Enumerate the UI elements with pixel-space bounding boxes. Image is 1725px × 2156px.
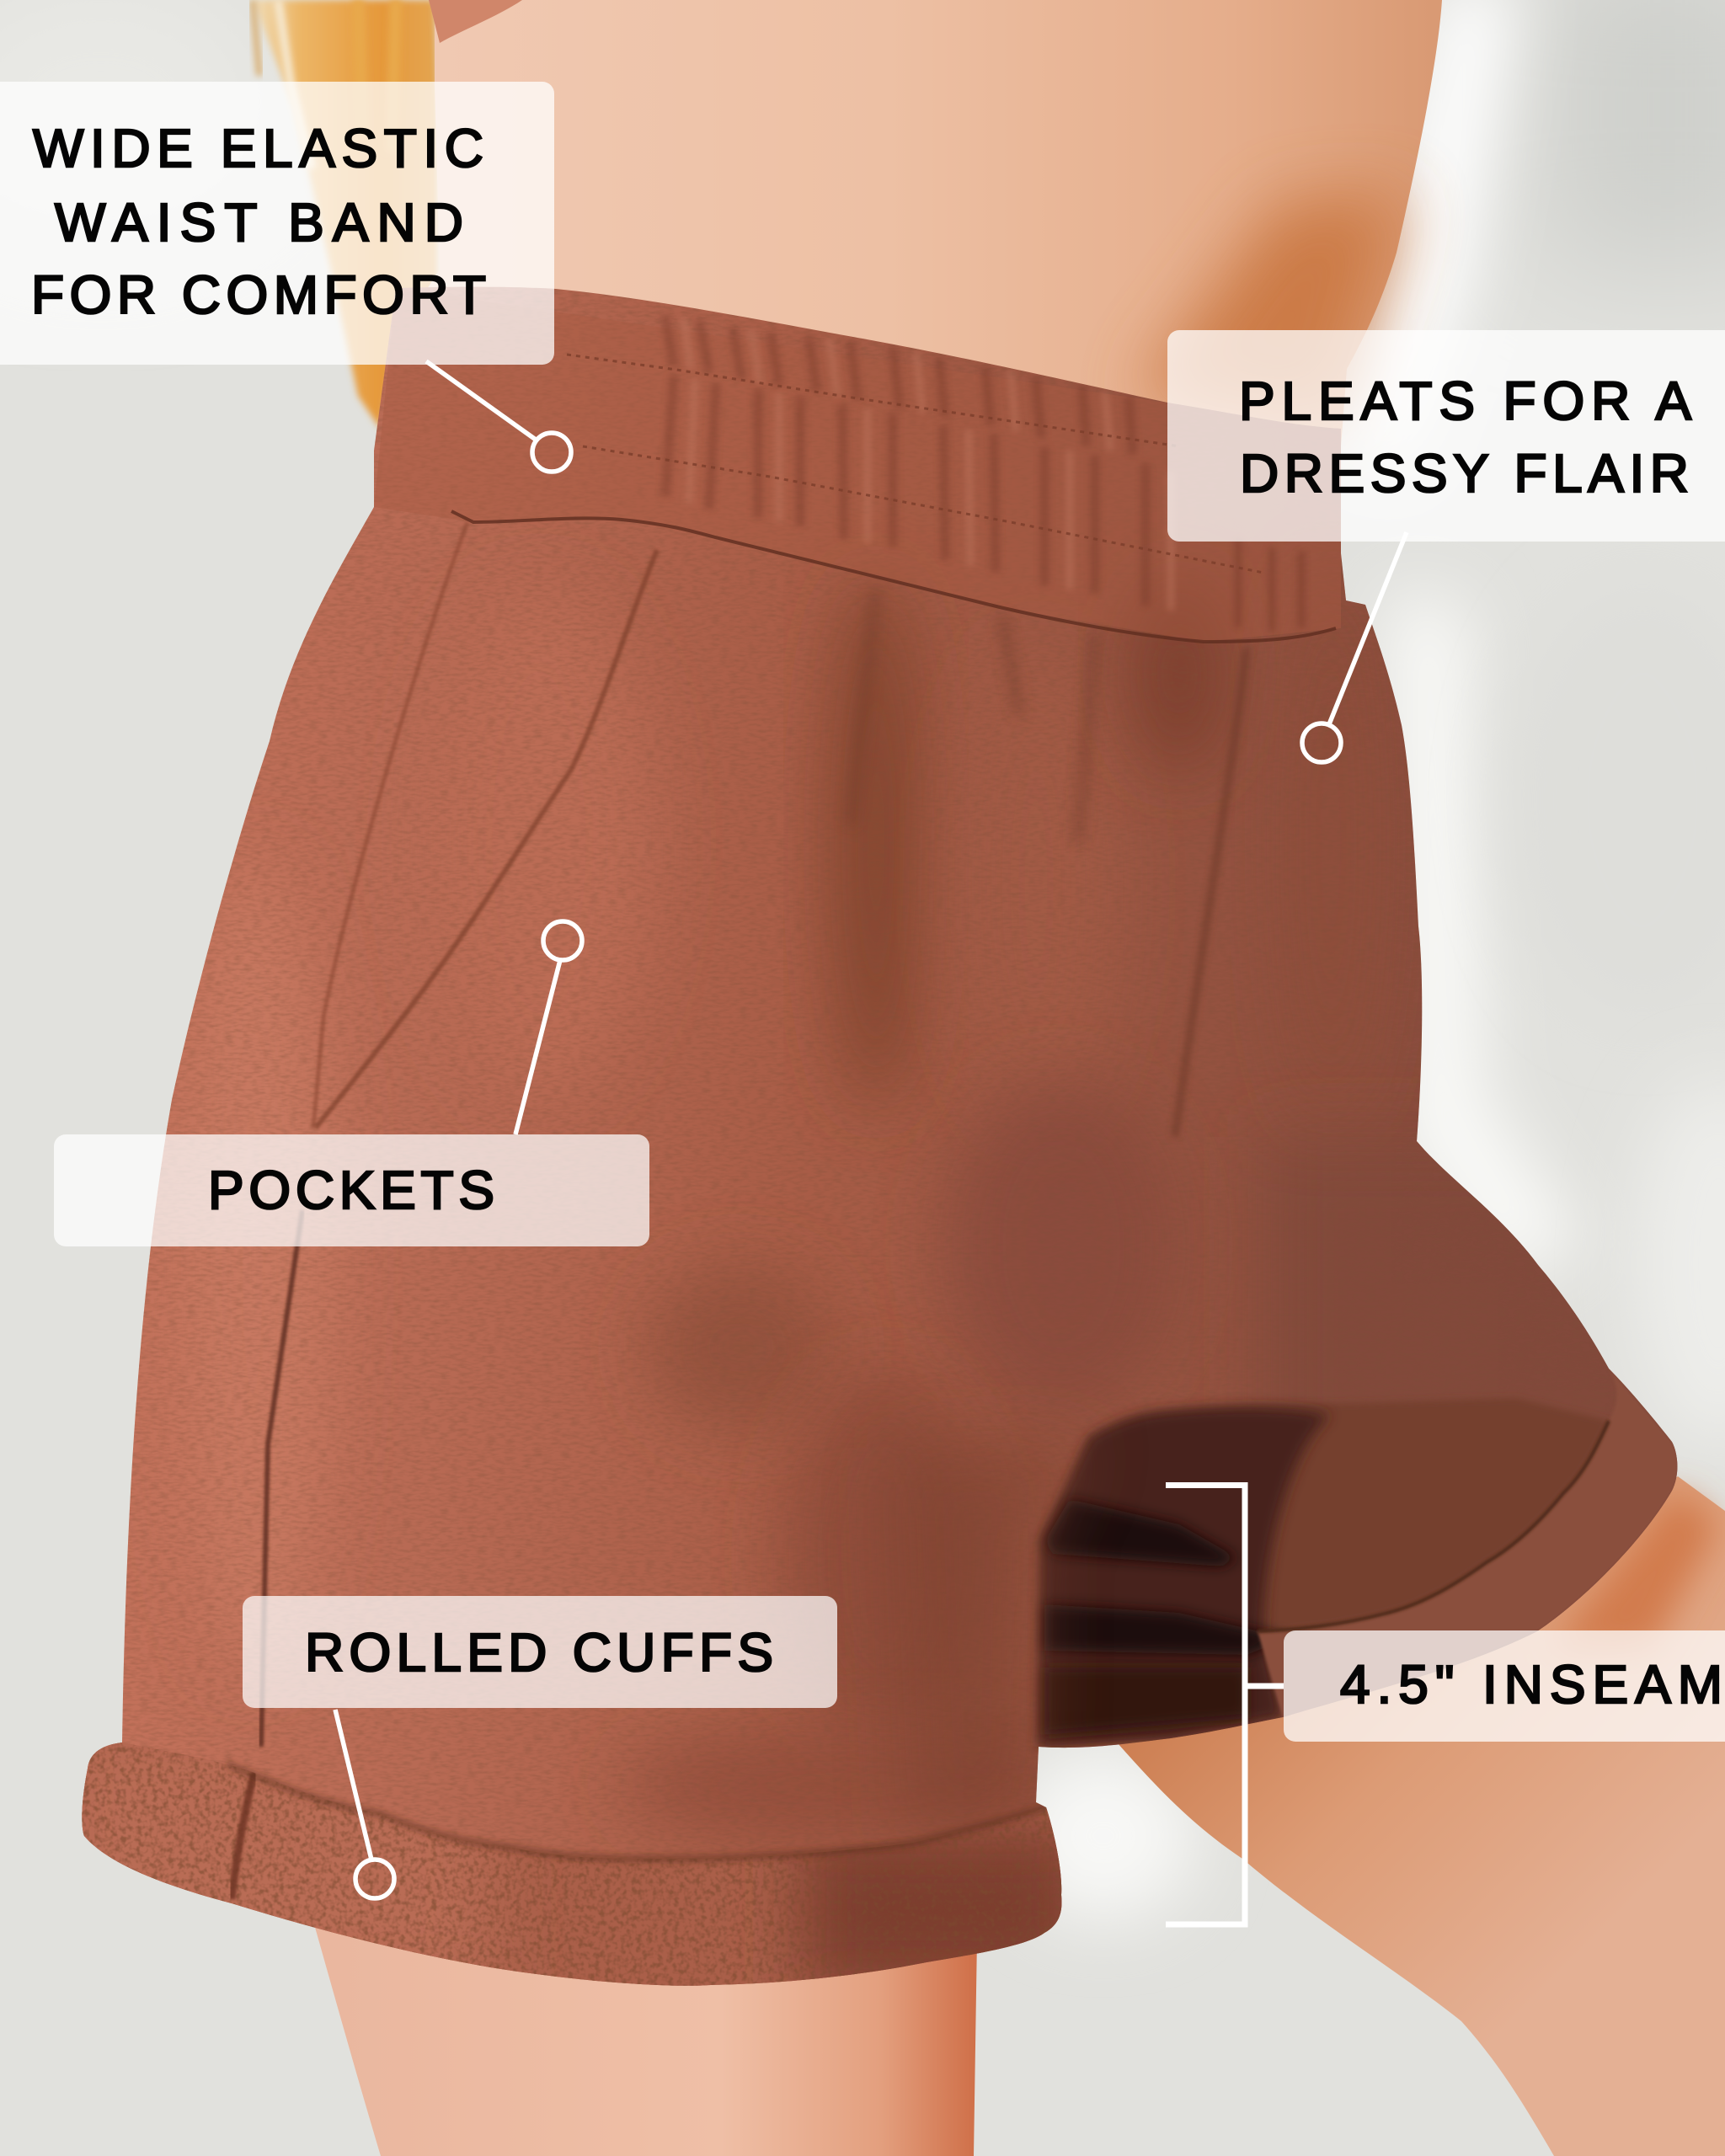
torso: [396, 0, 1442, 446]
pleats text: DRESSY FLAIR: [1240, 443, 1689, 504]
pockets pointer: [515, 921, 582, 1134]
shorts shading: [177, 564, 1685, 1844]
pleats text: PLEATS FOR A: [1239, 371, 1691, 431]
shorts: [51, 270, 1710, 2004]
rolled cuffs text: ROLLED CUFFS: [305, 1622, 773, 1683]
inner shadow: back of leg: [1039, 1369, 1677, 1747]
waist band pointer: [426, 361, 571, 472]
front leg: [314, 1924, 977, 2156]
front cuff: [51, 1726, 1087, 1996]
callout: pockets: [54, 921, 649, 1246]
waist band text: FOR COMFORT: [31, 264, 486, 325]
pleats text: [1239, 371, 1691, 504]
bra strap: [429, 0, 522, 43]
rolled cuffs pointer: [335, 1710, 394, 1898]
inseam bracket: [1166, 1486, 1284, 1924]
callout: pleats: [1167, 330, 1725, 762]
back cuff: [1258, 1369, 1677, 1717]
pockets text: POCKETS: [208, 1160, 494, 1220]
waistband: [374, 288, 1341, 642]
pleats pointer: [1302, 532, 1407, 762]
callout: rolled cuffs: [243, 1596, 837, 1898]
inseam text: 4.5" INSEAM: [1340, 1654, 1722, 1715]
callout: inseam: [1166, 1486, 1725, 1924]
waistband seam: [451, 511, 1336, 642]
knit texture: [122, 290, 1422, 1854]
callout: wide elastic waist band: [0, 82, 571, 472]
waist band text: WAIST BAND: [55, 192, 463, 253]
front panel edge: [893, 1438, 1089, 1844]
hair: [253, 0, 438, 430]
pocket seams and folds: [261, 522, 1247, 1747]
back leg: [1118, 1476, 1725, 2156]
waist band text: WIDE ELASTIC: [33, 118, 483, 179]
waist band text: [31, 118, 486, 325]
